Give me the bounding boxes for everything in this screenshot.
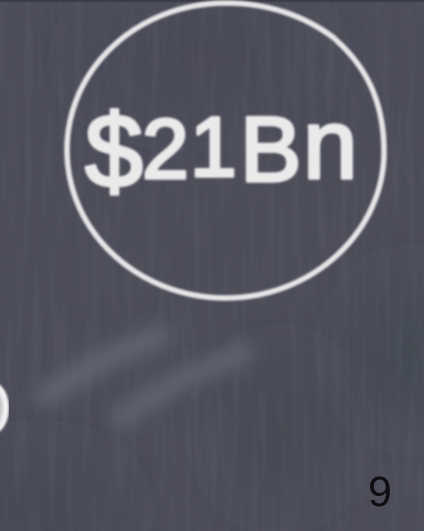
partial chalk circle at left edge [0, 385, 6, 431]
chalk value: $21Bn: n [303, 89, 358, 199]
chalk value: $21Bn: B [240, 99, 301, 201]
chalk smudges [45, 335, 245, 418]
chalk circle [67, 3, 384, 298]
chalk value: $21Bn: 1 [190, 100, 237, 194]
page number: 9 [368, 468, 392, 516]
chalk value: $21Bn: 2 [142, 102, 189, 196]
chalk value: $21Bn [85, 89, 358, 210]
chalk value: $21Bn: $ [85, 94, 143, 210]
